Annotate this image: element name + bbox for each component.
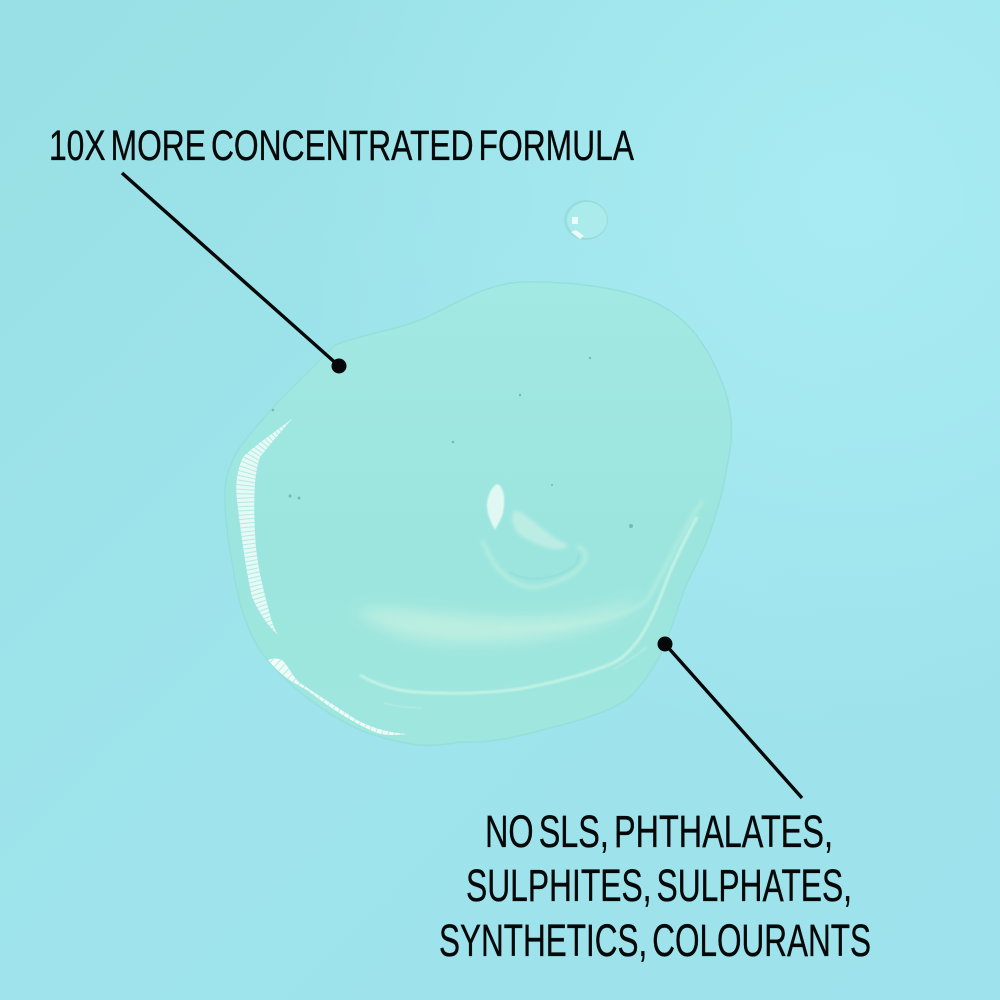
highlight: left glare <box>236 418 293 635</box>
highlight: centre ripple <box>482 540 586 587</box>
arrow: formula pointer <box>122 173 346 374</box>
highlight: bottom left glare <box>268 658 406 735</box>
highlight: bottom edge line <box>360 517 697 693</box>
arrow: free-from pointer <box>658 636 802 798</box>
illustration: liquid puddle <box>225 282 732 745</box>
text block: free-from list: SULPHITES, SULPHATES, <box>466 860 852 911</box>
highlight: inner edge lines <box>383 647 647 708</box>
highlight: centre ripple shadow <box>510 554 579 578</box>
specks <box>272 357 633 528</box>
heading: concentrated formula label: 10X MORE CONCENTRATED FORMULA <box>49 122 634 170</box>
highlight: centre speckle <box>512 510 568 549</box>
highlight: right curve <box>500 500 703 628</box>
text block: free-from list <box>439 806 871 966</box>
highlight: lower sheen <box>355 598 640 644</box>
illustration: liquid droplet <box>564 200 608 240</box>
highlight: centre glare <box>487 484 504 530</box>
text block: free-from list: NO SLS, PHTHALATES, <box>485 806 833 857</box>
